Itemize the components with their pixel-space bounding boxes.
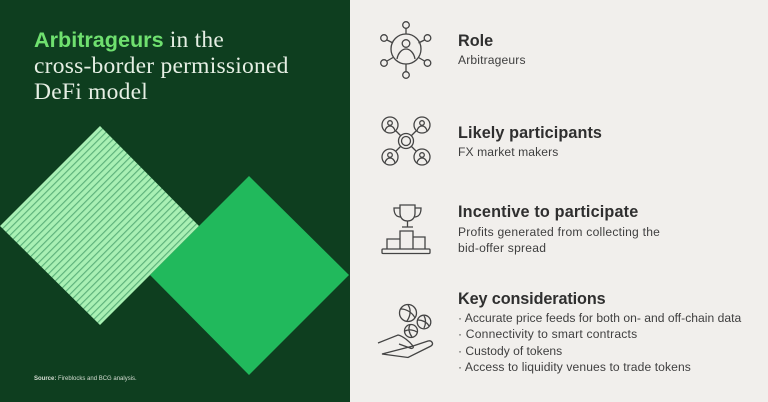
list: considerations	[458, 311, 742, 374]
text: participants: FX market makers	[458, 145, 558, 159]
icon: network person	[380, 21, 432, 79]
text: incentive: bid-offer spread	[458, 241, 546, 255]
heading: considerations: Key considerations	[458, 290, 606, 308]
text: incentive	[458, 225, 660, 255]
text: incentive: Profits generated from collecting the	[458, 225, 660, 239]
title: cross-border permissioned	[34, 53, 289, 79]
heading: participants: Likely participants	[458, 124, 602, 142]
list: considerations: · Custody of tokens	[458, 344, 562, 358]
icon: trophy and podium	[381, 204, 431, 254]
title: Arbitrageurs in the	[34, 27, 224, 53]
text: role: Arbitrageurs	[458, 53, 526, 67]
list: considerations: · Access to liquidity venues to trade tokens	[458, 360, 691, 374]
list: considerations: · Accurate price feeds for both on- and off-chain data	[458, 311, 741, 325]
solid diamond	[150, 176, 349, 375]
title	[34, 27, 289, 105]
source note: Source: Fireblocks and BCG analysis.	[34, 376, 137, 382]
heading: role: Role	[458, 32, 493, 50]
panel: dark green left	[0, 0, 350, 402]
icon: hand with balls	[378, 304, 434, 358]
diamonds graphic	[0, 126, 349, 375]
heading: incentive: Incentive to participate	[458, 203, 638, 221]
list: considerations: · Connectivity to smart contracts	[458, 327, 637, 341]
striped diamond	[0, 126, 199, 325]
icon: participants	[381, 116, 431, 166]
title: DeFi model	[34, 79, 148, 105]
